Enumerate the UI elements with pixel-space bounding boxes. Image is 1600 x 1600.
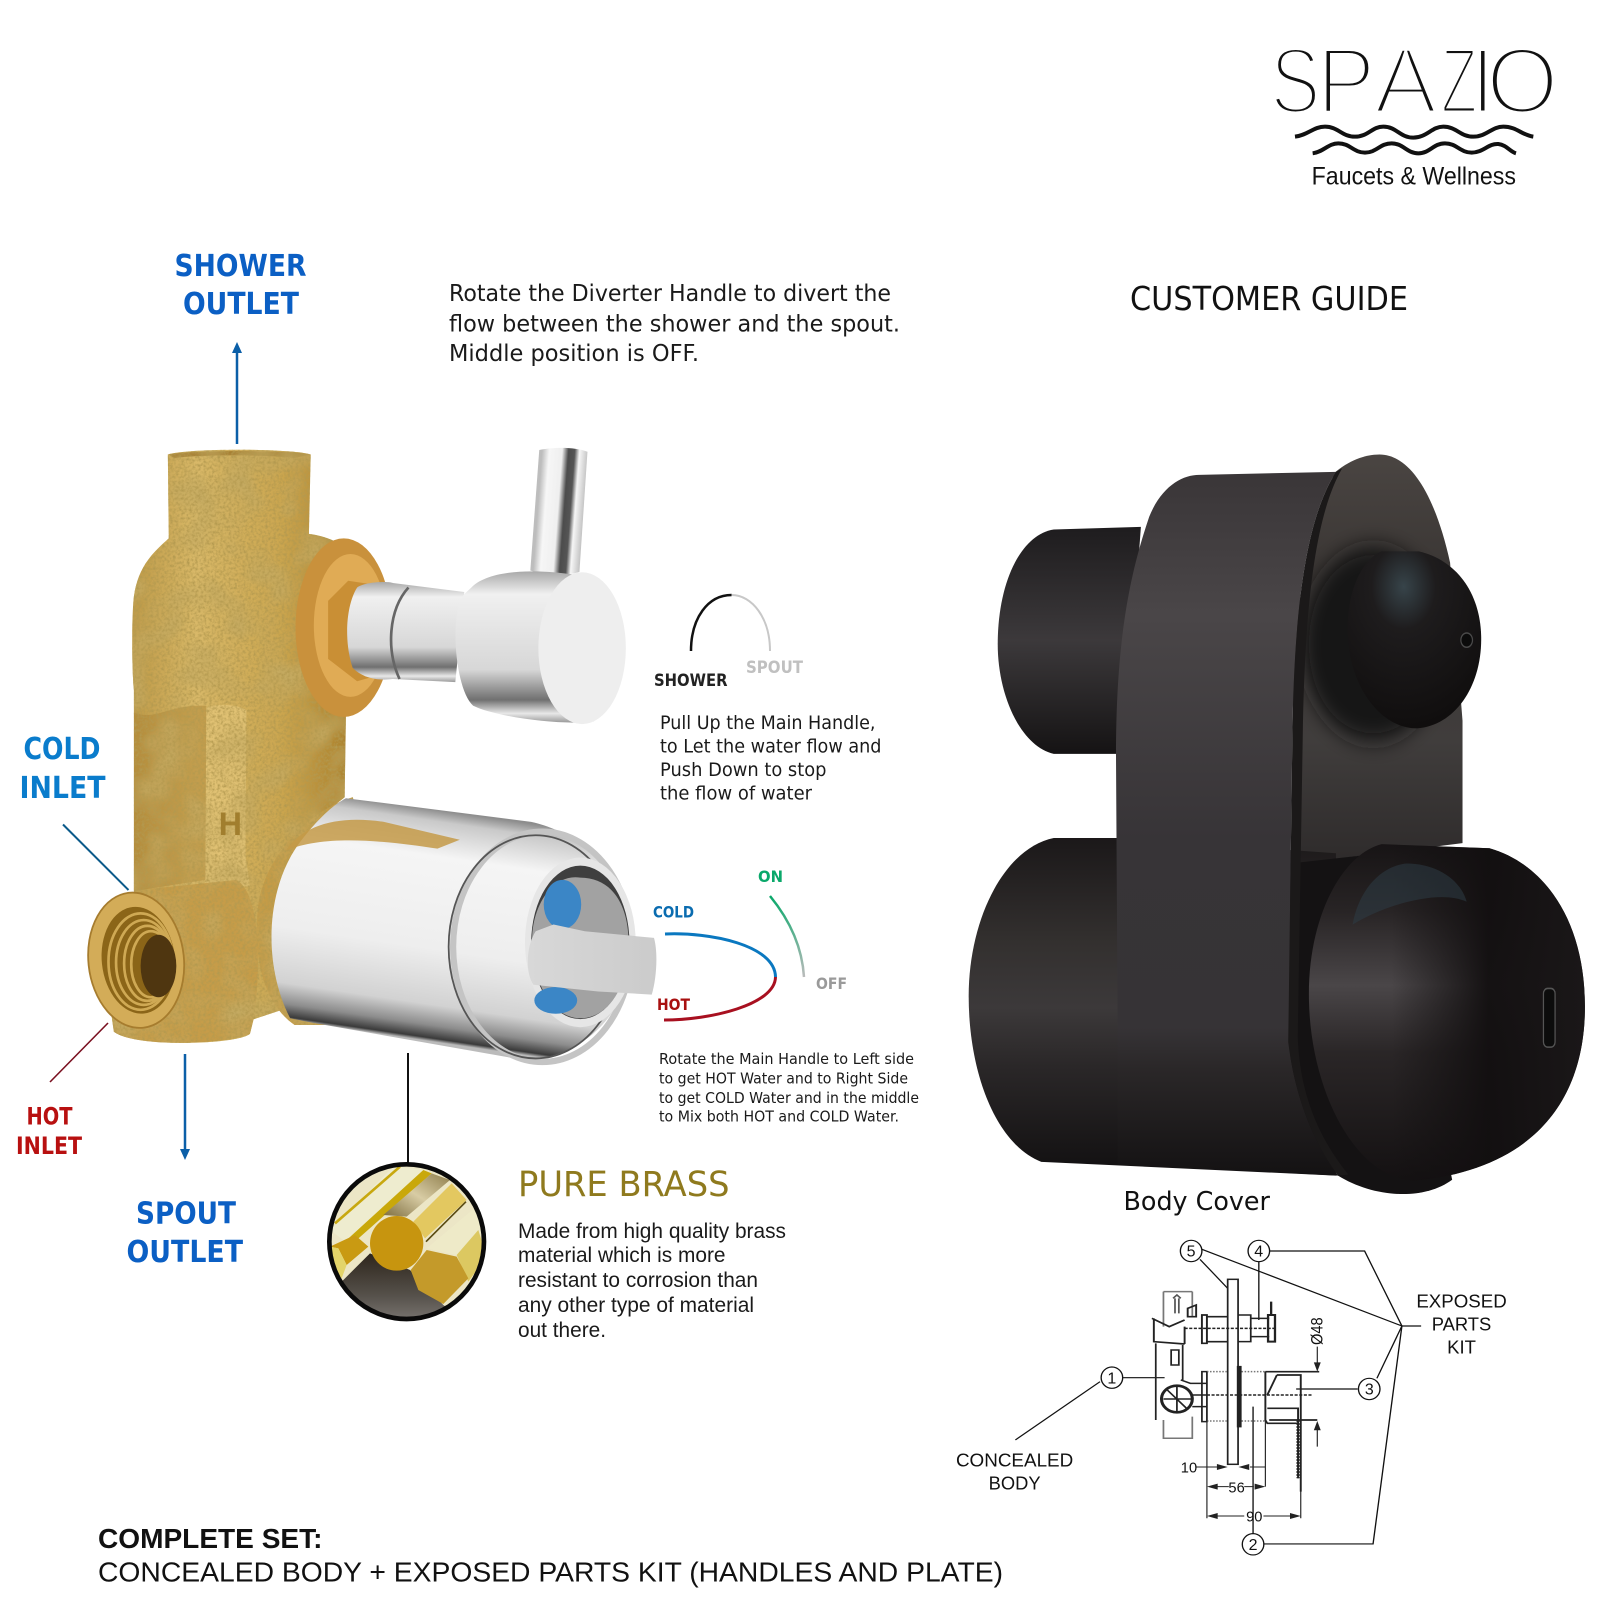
heading: customer guide: CUSTOMER GUIDE — [1130, 279, 1408, 318]
logo wordmark: O — [1486, 29, 1559, 133]
diverter collar — [296, 538, 393, 717]
label: exposed parts kit: KIT — [1447, 1338, 1476, 1358]
lower left cylinder — [969, 838, 1336, 1176]
text: pure brass description: out there. — [518, 1319, 606, 1342]
centre band — [1116, 472, 1338, 1176]
label: exposed parts kit: PARTS — [1432, 1315, 1491, 1335]
logo: Spazio Faucets & Wellness — [1270, 29, 1559, 190]
label: cold inlet: COLD — [24, 732, 100, 767]
large knob — [1309, 844, 1585, 1181]
text: main handle rotate: to get HOT Water and to Right Side — [659, 1070, 908, 1088]
label: concealed body: BODY — [989, 1474, 1041, 1494]
text: diverter instructions: Middle position is OFF. — [449, 339, 699, 367]
dimensions text: Ø48 — [1308, 1317, 1327, 1345]
callout numbers: 2 — [1249, 1537, 1258, 1554]
text: diverter instructions — [449, 279, 900, 367]
callout numbers: 4 — [1254, 1244, 1263, 1261]
label: concealed body — [956, 1451, 1073, 1494]
label: hot inlet: HOT — [26, 1102, 73, 1130]
upper left cylinder — [998, 527, 1141, 754]
text: main handle rotate: to Mix both HOT and COLD Water. — [659, 1108, 899, 1126]
text: diverter instructions: Rotate the Diverter Handle to divert the — [449, 279, 891, 307]
technical diagram — [956, 1240, 1507, 1555]
photo: brass valve with chrome handles — [82, 448, 656, 1062]
text: diverter instructions: flow between the shower and the spout. — [449, 310, 900, 338]
text: complete set — [98, 1523, 1003, 1588]
heading: pure brass: PURE BRASS — [518, 1165, 730, 1205]
dial: hot and cold: HOT — [657, 995, 690, 1014]
diverter lever — [530, 448, 587, 575]
leader lines — [1015, 1249, 1421, 1544]
label: shower outlet: SHOWER — [174, 249, 306, 284]
lower plate — [1290, 853, 1452, 1194]
caption: body cover: Body Cover — [1124, 1187, 1270, 1217]
logo waves — [1295, 127, 1533, 153]
dimensions text: 56 — [1228, 1480, 1245, 1496]
text: pure brass description: material which is more — [518, 1244, 726, 1267]
small knob — [1347, 551, 1481, 728]
dimensions text: 10 — [1181, 1460, 1197, 1476]
label: hot inlet — [16, 1102, 83, 1160]
dial: shower and spout — [654, 595, 803, 691]
mixer cartridge chrome — [271, 798, 636, 1062]
icon: brass rods circle — [327, 1162, 486, 1322]
logo wordmark — [1270, 29, 1559, 133]
logo wordmark: Z — [1441, 29, 1477, 133]
stem groove — [391, 587, 408, 679]
plastic spindle — [528, 925, 656, 995]
cold inlet port — [87, 892, 185, 1029]
arrow: spout outlet — [180, 1054, 190, 1160]
logo wordmark: A — [1374, 29, 1438, 133]
label: cold inlet — [20, 732, 106, 806]
label: exposed parts kit: EXPOSED — [1416, 1292, 1507, 1312]
text: main handle pull: the flow of water — [660, 782, 812, 804]
dial: shower and spout: SHOWER — [654, 671, 728, 691]
text: complete set: CONCEALED BODY + EXPOSED PARTS KIT (HANDLES AND PLATE) — [98, 1556, 1003, 1588]
leader: cold inlet — [63, 824, 128, 890]
dimension lines — [1196, 1347, 1321, 1519]
brass body — [112, 450, 371, 1043]
text: main handle rotate — [659, 1050, 919, 1126]
leader: hot inlet — [50, 1023, 108, 1082]
dial: hot and cold: COLD — [653, 902, 694, 922]
label: concealed body: CONCEALED — [956, 1451, 1073, 1471]
logo wordmark: S — [1270, 29, 1320, 133]
label: shower outlet — [174, 249, 306, 322]
text: main handle pull: Pull Up the Main Handle, — [660, 712, 876, 734]
text: pure brass description: any other type of material — [518, 1294, 754, 1317]
dial: hot and cold: ON — [758, 867, 783, 886]
text: main handle pull: to Let the water flow and — [660, 736, 882, 758]
dial: shower and spout: SPOUT — [746, 658, 803, 678]
label: shower outlet: OUTLET — [183, 287, 299, 322]
dial: hot and cold: OFF — [816, 974, 847, 993]
leader: brass detail — [407, 1053, 409, 1164]
text: pure brass description: Made from high quality brass — [518, 1220, 786, 1243]
arrow: shower outlet — [232, 342, 242, 444]
label: spout outlet: OUTLET — [126, 1235, 243, 1270]
logo wordmark: P — [1317, 29, 1375, 133]
back plate — [1290, 454, 1463, 864]
text: main handle rotate: to get COLD Water and in the middle — [659, 1089, 919, 1107]
text: complete set: COMPLETE SET: — [98, 1523, 322, 1554]
text: pure brass description: resistant to corrosion than — [518, 1269, 758, 1292]
callout numbers: 5 — [1187, 1244, 1196, 1261]
label: exposed parts kit — [1416, 1292, 1507, 1358]
plate rim — [1288, 468, 1348, 1176]
logo tagline: Faucets & Wellness — [1312, 163, 1516, 190]
label: cold inlet: INLET — [20, 771, 106, 806]
callout numbers: 1 — [1107, 1370, 1116, 1387]
diverter knob — [455, 571, 626, 724]
drawing: valve section — [1152, 1279, 1319, 1492]
photo: black body cover — [969, 454, 1585, 1194]
label: hot inlet: INLET — [16, 1132, 83, 1160]
callouts 1 to 5 — [1101, 1240, 1380, 1555]
diverter stem — [347, 582, 464, 682]
embossed mark: H — [219, 806, 242, 842]
callout numbers — [1107, 1244, 1374, 1554]
text: pure brass description — [518, 1220, 786, 1342]
knob shadow on plate — [1303, 547, 1444, 741]
callout numbers: 3 — [1365, 1382, 1374, 1399]
logo wordmark: I — [1471, 29, 1495, 133]
label: spout outlet: SPOUT — [136, 1196, 236, 1232]
dimensions text — [1181, 1317, 1327, 1526]
text: main handle rotate: Rotate the Main Handle to Left side — [659, 1050, 914, 1068]
label: spout outlet — [126, 1196, 243, 1270]
dial: hot and cold — [653, 867, 847, 1020]
blue cartridge — [534, 880, 581, 1014]
text: main handle pull — [660, 712, 882, 804]
text: main handle pull: Push Down to stop — [660, 759, 826, 781]
dimensions text: 90 — [1246, 1510, 1262, 1526]
